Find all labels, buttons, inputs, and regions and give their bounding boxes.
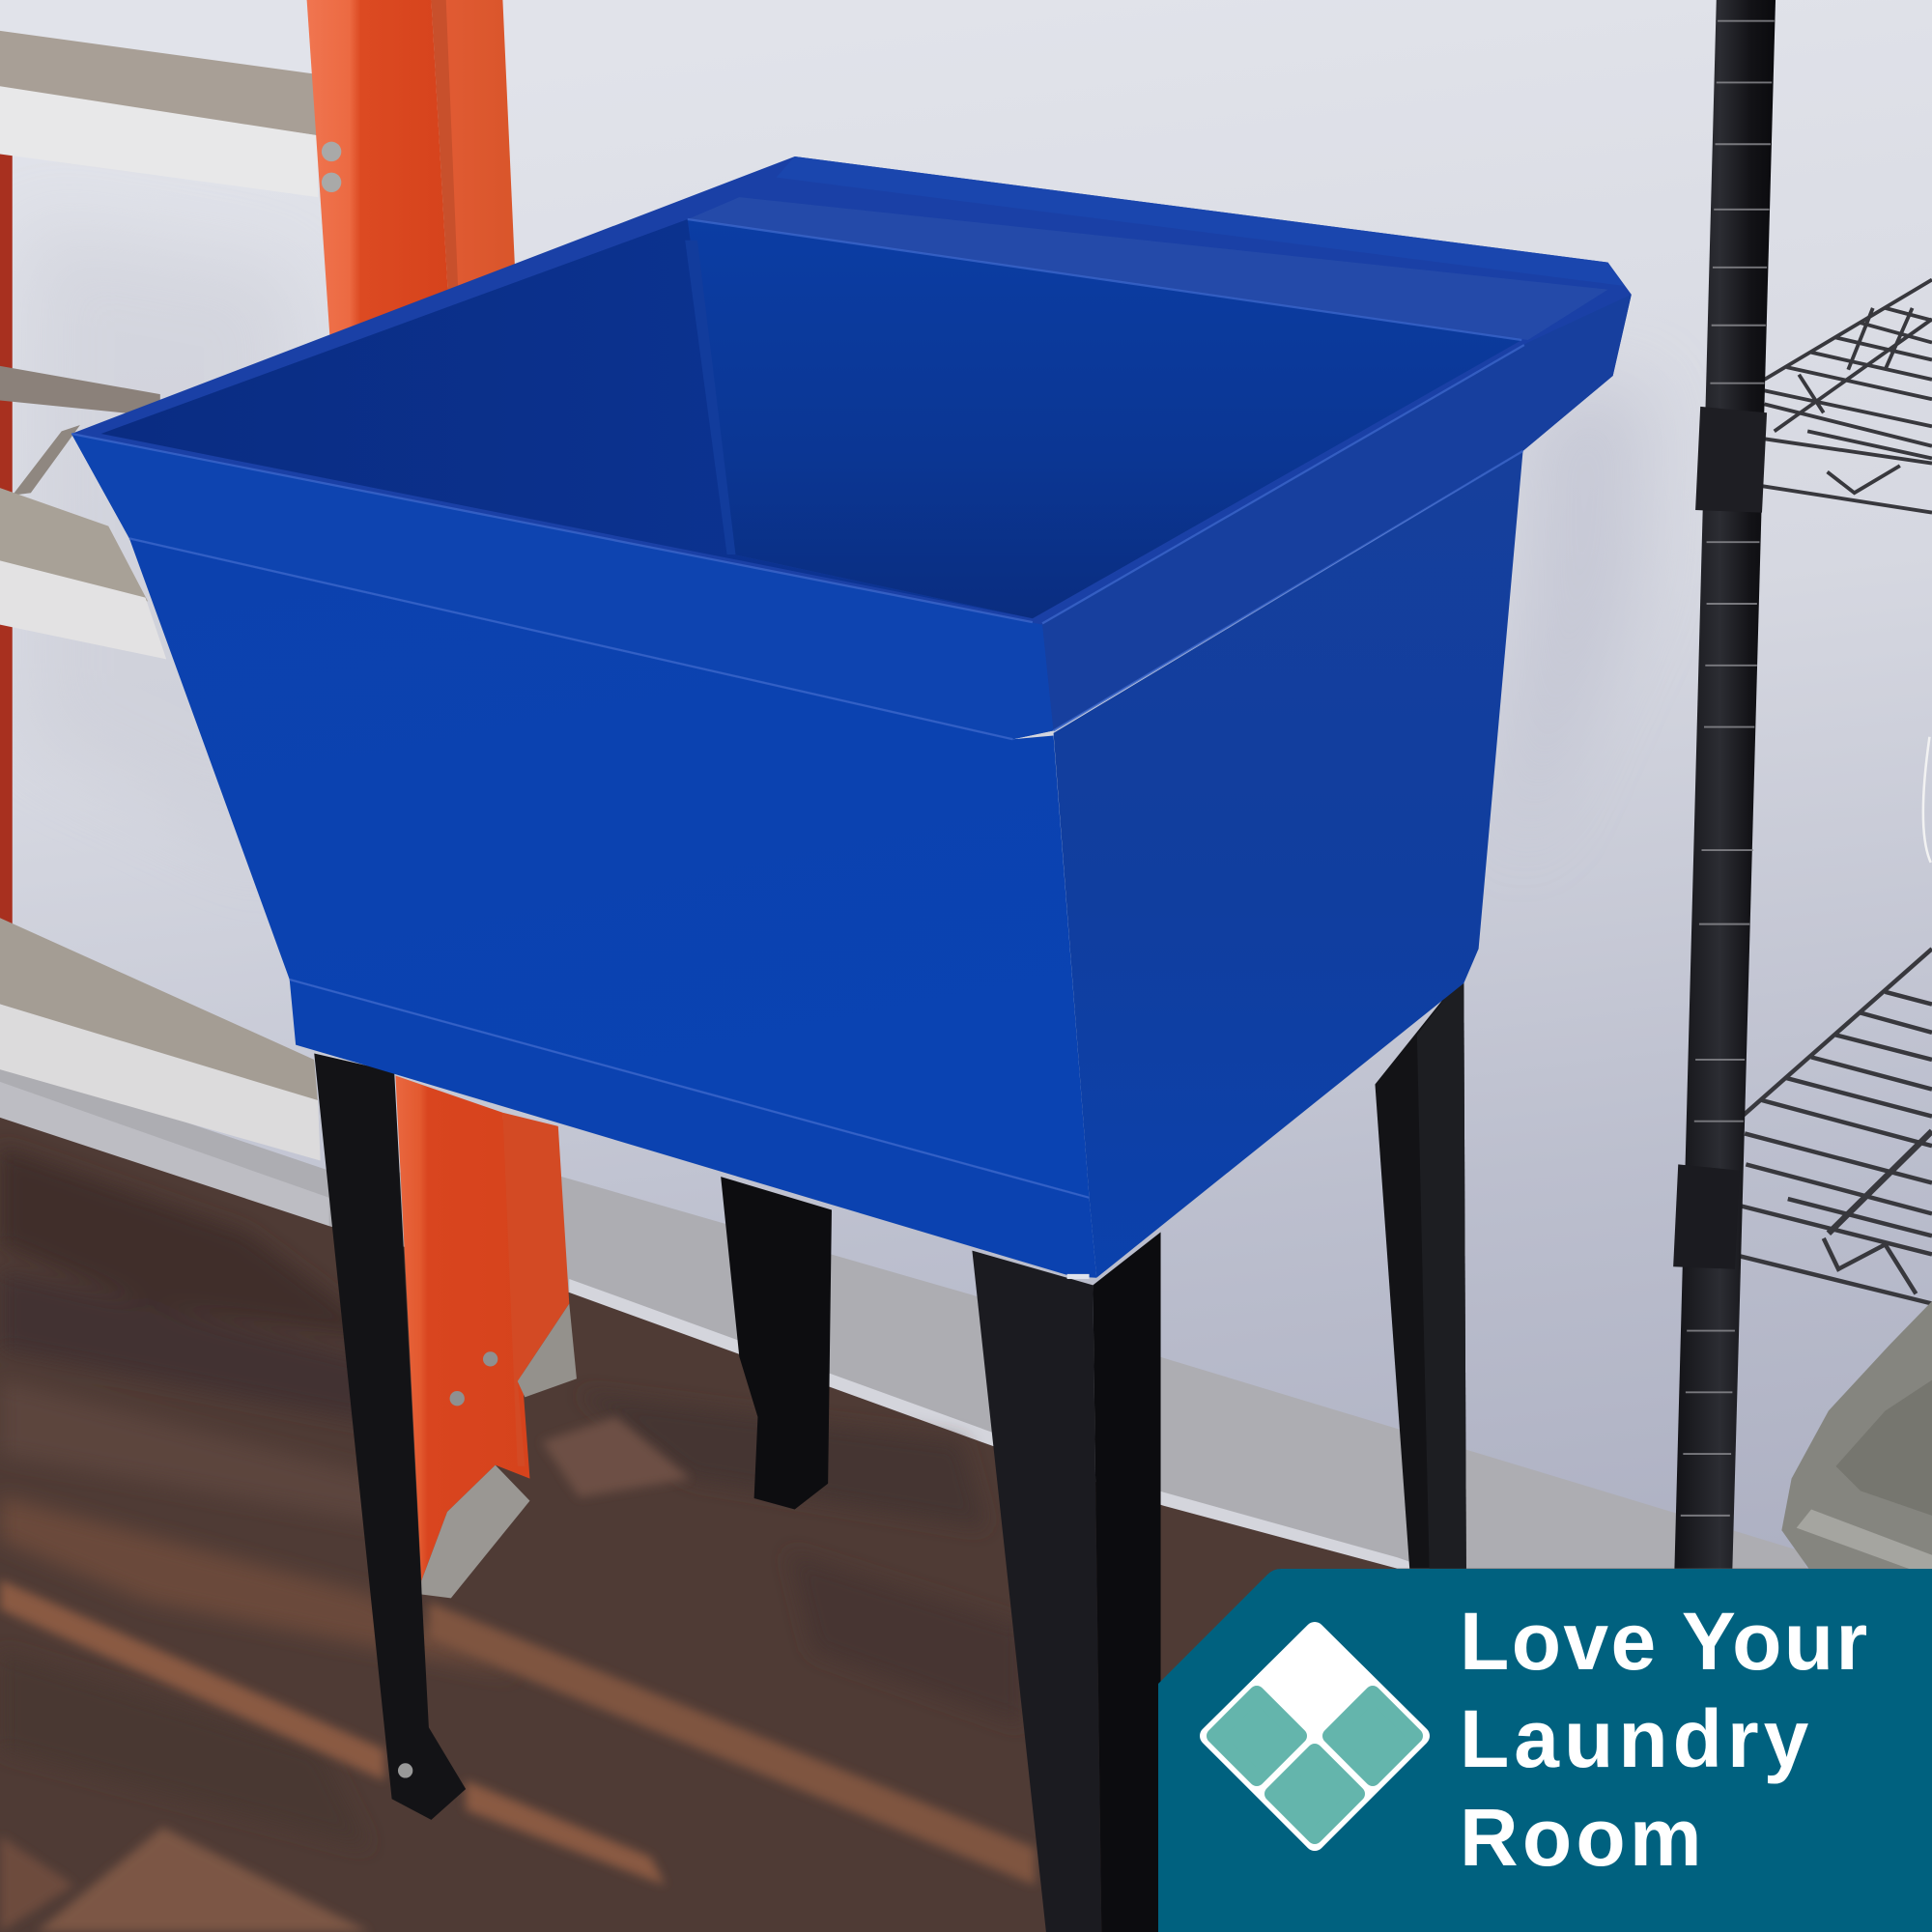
white diamond — [1209, 1632, 1420, 1841]
right rim — [1042, 295, 1632, 730]
grey storage bin — [1781, 1301, 1932, 1577]
rung 3 — [0, 488, 148, 601]
sink silhouette — [71, 156, 1632, 739]
back right leg — [1375, 974, 1466, 1569]
inner left wall — [101, 219, 1033, 618]
lower collar — [1673, 1164, 1740, 1269]
lower rail rivets — [483, 1351, 497, 1367]
badge panel — [1158, 1569, 1932, 1932]
wall shadows — [25, 222, 1651, 863]
badge text: Laundry — [1460, 1693, 1813, 1784]
badge text: Love Your — [1460, 1596, 1870, 1687]
rung 2 strut — [0, 366, 160, 416]
lower rail — [395, 1076, 529, 1580]
logo: diamond — [1209, 1632, 1420, 1841]
left ladder rail — [0, 148, 13, 924]
rung 4 — [0, 918, 318, 1103]
teal bottom tile — [1272, 1751, 1357, 1836]
lower front trim — [290, 980, 1096, 1278]
badge text — [1460, 1596, 1870, 1883]
front rim — [71, 434, 1054, 739]
teal left tile — [1214, 1693, 1299, 1778]
rear foot plate — [518, 1303, 577, 1397]
metal pole — [1674, 0, 1776, 1569]
rear deck — [688, 197, 1608, 340]
wood floor — [0, 1118, 1932, 1932]
pole rings — [1681, 21, 1775, 1516]
wire shelving unit — [1673, 0, 1932, 1577]
badge text: Room — [1460, 1792, 1706, 1883]
upper collar — [1695, 407, 1767, 513]
stepladder — [0, 0, 577, 1598]
blue utility sink — [71, 156, 1632, 1279]
upper wire shelf — [1754, 280, 1932, 513]
right face — [1054, 451, 1523, 1278]
baseboard — [0, 1060, 1824, 1602]
white chip at base — [1067, 1274, 1090, 1279]
teal right tile — [1330, 1693, 1415, 1778]
back centre leg — [721, 1177, 832, 1509]
rivets — [322, 142, 341, 161]
rim highlights — [71, 219, 1524, 1198]
front foot plate — [421, 1465, 529, 1598]
front face — [129, 538, 1090, 1198]
upper rail — [307, 0, 448, 343]
back lip — [777, 156, 1624, 286]
brand badge — [1158, 1569, 1932, 1932]
inner corner line — [685, 241, 735, 554]
front left leg — [314, 1054, 466, 1820]
inner back wall — [688, 219, 1521, 618]
rung 1 — [0, 31, 318, 135]
white cable — [1923, 737, 1931, 863]
front centre leg — [972, 1233, 1161, 1932]
lower wire shelf — [1727, 949, 1932, 1303]
